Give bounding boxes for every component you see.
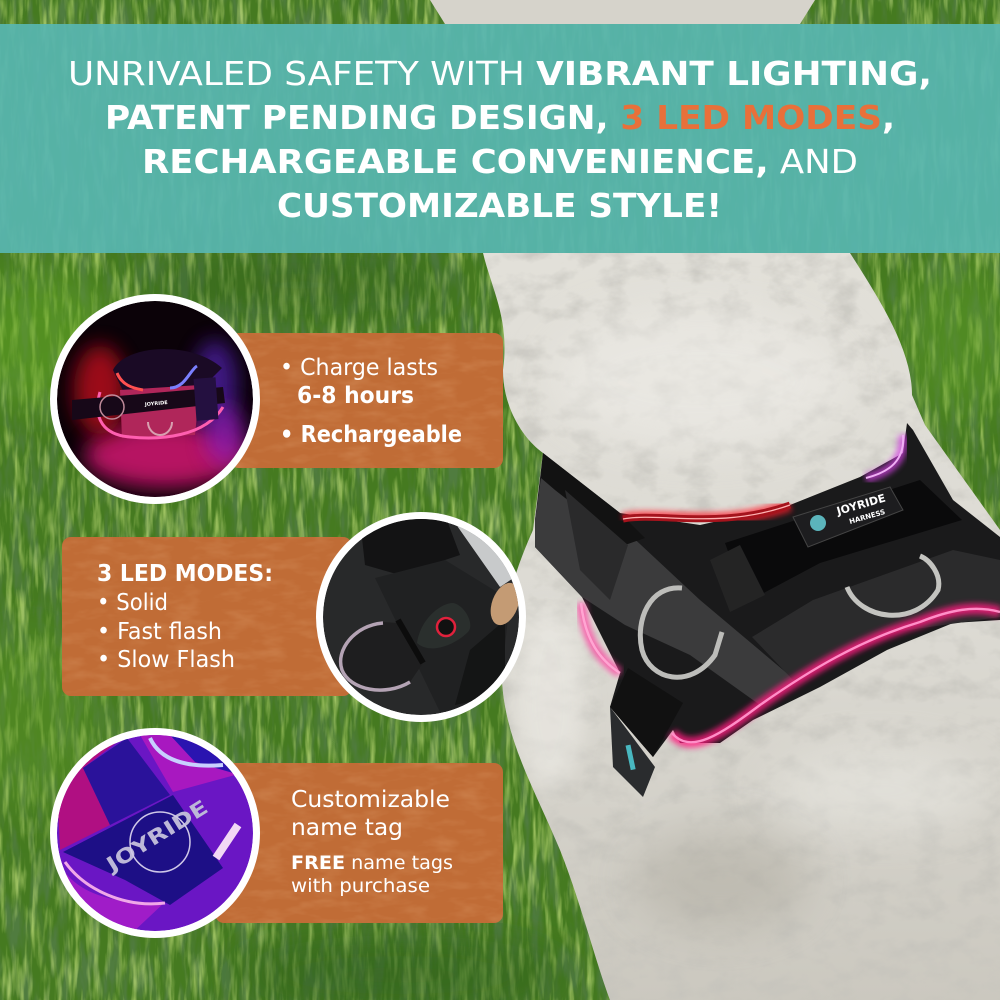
collar webbing xyxy=(535,478,795,705)
LED modes text: 3 LED MODES: xyxy=(97,561,273,587)
headline: CUSTOMIZABLE STYLE! xyxy=(277,186,722,225)
photo: glowing harness xyxy=(50,294,260,504)
brand patch: HARNESS xyxy=(848,508,886,526)
headline: UNRIVALED SAFETY WITH VIBRANT LIGHTING, xyxy=(68,54,932,93)
dog body xyxy=(480,250,1000,1000)
LED modes text: • Slow Flash xyxy=(97,647,235,673)
photo: LED button xyxy=(316,512,530,722)
D ring xyxy=(847,556,939,615)
harness body xyxy=(535,423,1000,757)
power button xyxy=(417,603,470,648)
charge text: • Charge lasts xyxy=(280,355,438,381)
O ring xyxy=(640,588,722,677)
buckle with teal label xyxy=(610,707,655,797)
LED modes text: • Fast flash xyxy=(97,619,222,645)
name tag text xyxy=(291,787,453,897)
LED strip: purple xyxy=(866,435,903,478)
headline xyxy=(68,54,932,225)
D ring xyxy=(341,622,423,690)
side buckle strap xyxy=(610,668,683,757)
panel: LED modes xyxy=(62,537,352,696)
photo: name tag xyxy=(50,728,260,938)
LED strip: pink lower xyxy=(672,609,1000,742)
panel: charge xyxy=(230,333,503,468)
padded handle xyxy=(725,480,962,595)
quilted panel xyxy=(752,550,1000,680)
photo: name tag: JOYRIDE xyxy=(100,795,212,878)
name tag text: FREE name tags xyxy=(291,852,453,874)
headline: RECHARGEABLE CONVENIENCE, AND xyxy=(142,142,858,181)
dog head behind banner xyxy=(430,0,815,24)
top handle arc xyxy=(113,349,222,390)
top banner xyxy=(0,24,1000,253)
fingertip xyxy=(490,582,518,626)
brand patch: JOYRIDE xyxy=(834,492,887,518)
LED strip: pink left xyxy=(581,603,620,673)
harness xyxy=(535,423,1000,797)
LED outline xyxy=(98,392,223,438)
strap xyxy=(72,387,225,420)
charge text xyxy=(280,355,462,448)
name tag text: with purchase xyxy=(291,875,430,897)
charge text: 6-8 hours xyxy=(297,383,414,409)
LED strip: red xyxy=(623,505,790,519)
LED modes text xyxy=(97,561,273,673)
headline: PATENT PENDING DESIGN, 3 LED MODES , xyxy=(105,98,895,137)
LED modes text: • Solid xyxy=(97,590,168,616)
name tag text: name tag xyxy=(291,815,403,841)
name tag text: Customizable xyxy=(291,787,450,813)
photo: glowing harness: JOYRIDE xyxy=(144,400,168,408)
brand patch xyxy=(793,487,903,547)
charge text: • Rechargeable xyxy=(280,422,462,448)
panel: name tag xyxy=(215,763,503,923)
